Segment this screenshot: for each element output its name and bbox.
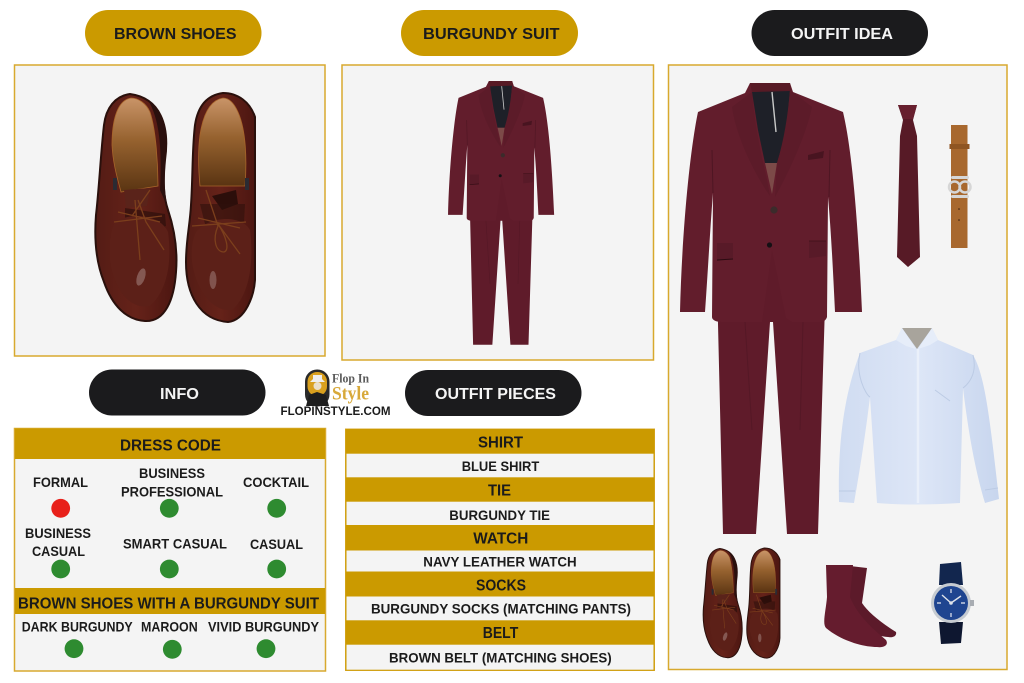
panel: outfit idea [668,65,1007,670]
rating: cocktail [243,474,309,518]
rating: business casual [25,525,91,578]
pill heading: burgundy suit [401,10,578,56]
logo: flop in style: FLOPINSTYLE.COM [280,404,391,418]
pill heading: outfit pieces: OUTFIT PIECES [435,386,556,403]
row: navy leather watch [346,550,654,572]
icon: pair of brown shoes [95,93,255,322]
row: burgundy socks: BURGUNDY SOCKS (MATCHING PANTS) [371,601,631,617]
rating: formal [33,474,88,518]
rating: dark burgundy: DARK BURGUNDY [22,618,133,634]
row: blue shirt [346,454,654,477]
icon: burgundy suit [448,81,554,345]
row: belt heading: BELT [483,625,518,642]
row: navy leather watch: NAVY LEATHER WATCH [423,553,577,569]
pill heading: info [89,370,266,416]
rating: business professional: PROFESSIONAL [121,484,223,500]
heading: brown shoes with a burgundy suit: BROWN SHOES WITH A BURGUNDY SUIT [18,596,319,612]
icon: shoes small [703,548,780,658]
rating: business casual: CASUAL [32,543,85,559]
panel: brown shoes photo [14,65,325,356]
icon: suit large [680,83,862,534]
logo: flop in style: Style [332,384,369,404]
pill heading: brown shoes [85,10,262,56]
rating: business casual: BUSINESS [25,525,91,541]
row: burgundy socks [346,596,654,620]
heading: brown shoes with a burgundy suit [15,588,325,614]
heading: dress code [15,428,325,459]
rating: business professional: BUSINESS [139,465,205,481]
rating: casual [250,536,303,578]
rating: dark burgundy [22,618,133,658]
icon: blue shirt [839,328,999,504]
panel: burgundy suit photo [342,65,654,360]
row: tie heading: TIE [488,483,511,500]
rating: vivid burgundy: VIVID BURGUNDY [208,618,320,634]
rating: business professional [121,465,223,518]
icon: burgundy tie [897,105,920,267]
row: burgundy tie: BURGUNDY TIE [449,507,550,523]
heading: dress code: DRESS CODE [120,438,221,454]
icon: brown belt [949,125,970,248]
pill heading: brown shoes: BROWN SHOES [114,26,237,43]
rating: maroon: MAROON [141,618,198,634]
row: shirt heading: SHIRT [478,435,523,452]
row: socks heading: SOCKS [476,577,526,594]
pill heading: outfit pieces [405,370,582,416]
row: blue shirt: BLUE SHIRT [462,458,540,474]
panel: outfit pieces table [345,428,655,671]
rating: formal: FORMAL [33,474,88,490]
row: brown belt: BROWN BELT (MATCHING SHOES) [389,649,612,665]
logo: flop in style [280,370,391,418]
row: brown belt [346,645,654,670]
icon: navy leather watch [931,562,974,644]
pill heading: info: INFO [160,386,199,403]
rating: maroon [141,618,198,659]
rating: vivid burgundy [208,618,320,658]
row: watch heading: WATCH [473,530,528,547]
logo: flop in style: Flop In [332,370,370,386]
pill heading: outfit idea: OUTFIT IDEA [791,26,893,43]
panel: dress code info [14,428,326,671]
row: burgundy tie [346,502,654,525]
icon: burgundy socks [824,565,896,647]
rating: cocktail: COCKTAIL [243,474,309,490]
rating: smart casual [123,536,227,578]
pill heading: outfit idea [752,10,928,56]
rating: smart casual: SMART CASUAL [123,536,227,552]
rating: casual: CASUAL [250,536,303,552]
pill heading: burgundy suit: BURGUNDY SUIT [423,26,560,43]
